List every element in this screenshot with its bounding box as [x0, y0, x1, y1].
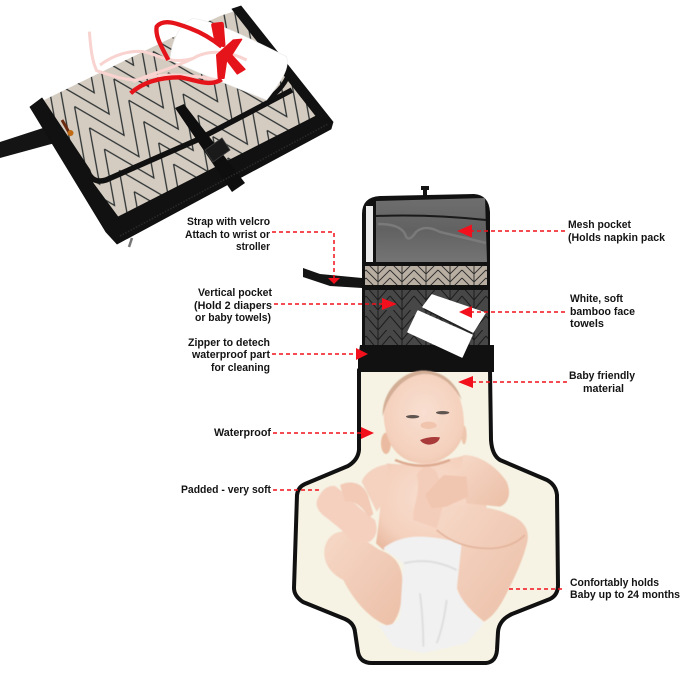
label: holds baby: Confortably holds	[570, 577, 659, 589]
label: zipper: waterproof part	[191, 349, 270, 361]
nose	[421, 422, 437, 429]
thigh crease	[437, 530, 525, 548]
photo: baby	[317, 371, 528, 653]
right arm	[460, 455, 509, 507]
left arm	[362, 464, 388, 512]
label: towels: bamboo face	[570, 306, 635, 318]
herringbone band	[365, 266, 487, 285]
left thigh and leg	[324, 531, 403, 627]
label: zipper: for cleaning	[211, 362, 270, 374]
strap with velcro	[303, 268, 362, 288]
label: holds baby	[570, 577, 680, 601]
label: padded: Padded - very soft	[181, 484, 271, 496]
label: mesh pocket	[568, 219, 666, 244]
zipper pull	[129, 238, 132, 247]
photo: folded changing bag	[0, 6, 333, 247]
flap edge	[88, 90, 292, 181]
leader: holds baby	[509, 588, 565, 590]
organiser body	[362, 194, 490, 345]
arrow: strap	[272, 232, 340, 284]
rolled towel and ribbons	[89, 18, 290, 100]
bag wrist strap	[0, 128, 55, 158]
herringbone fabric	[40, 10, 320, 220]
label: strap with velcro: Strap with velcro	[187, 216, 270, 228]
diaper	[378, 537, 484, 653]
eyes	[406, 411, 449, 418]
label: strap with velcro	[185, 216, 271, 253]
arrow: towels	[459, 306, 565, 318]
left ear	[381, 433, 391, 454]
pink ribbon	[89, 32, 247, 82]
label: baby friendly: material	[583, 383, 624, 395]
hand	[425, 475, 468, 508]
head	[384, 371, 464, 463]
diaper folds	[404, 561, 457, 647]
label: mesh pocket: Mesh pocket	[568, 219, 631, 231]
label: towels	[570, 293, 635, 330]
leader: padded	[273, 489, 320, 491]
bamboo towels	[408, 295, 485, 357]
label: towels: towels	[570, 318, 604, 330]
label: vertical pocket: Vertical pocket	[198, 287, 272, 299]
label: baby friendly	[569, 370, 636, 395]
right thigh and leg	[437, 505, 528, 622]
label: vertical pocket	[194, 287, 272, 324]
right foot	[413, 467, 447, 528]
hair	[383, 371, 462, 417]
dark vertical pocket	[365, 290, 488, 345]
arrow: zipper	[272, 348, 368, 360]
label: mesh pocket: (Holds napkin pack	[568, 232, 666, 244]
label: zipper: Zipper to detech	[188, 337, 270, 349]
mouth	[420, 437, 440, 445]
zipper	[120, 124, 328, 236]
cheek shadow under chin	[395, 460, 450, 466]
label: strap with velcro: stroller	[236, 241, 271, 253]
label: towels: White, soft	[570, 293, 623, 305]
label: zipper	[188, 337, 270, 374]
snap button	[421, 186, 429, 196]
right ear	[461, 426, 467, 444]
towel shadow band	[267, 70, 290, 100]
white inner strip	[366, 206, 373, 262]
zipper band	[358, 345, 494, 372]
label: vertical pocket: (Hold 2 diapers	[194, 300, 272, 312]
left hand	[340, 482, 373, 517]
logo tag	[62, 120, 74, 136]
left foot	[317, 486, 377, 543]
arrow: baby friendly material	[458, 376, 567, 388]
red ribbon	[131, 22, 245, 93]
panel: waterproof mat	[294, 370, 558, 663]
label: waterproof: Waterproof	[214, 427, 271, 439]
arrow: vertical pocket	[274, 298, 397, 310]
arrow: mesh pocket	[457, 224, 565, 238]
bag black border	[30, 6, 333, 244]
closure strap and buckle	[175, 104, 245, 192]
mesh pocket	[376, 198, 487, 262]
label: vertical pocket: or baby towels)	[195, 312, 271, 324]
panel: opened organiser section	[303, 186, 494, 372]
torso	[376, 455, 487, 550]
rolled white towel	[170, 18, 287, 100]
arrow: waterproof	[273, 427, 374, 439]
label: baby friendly: Baby friendly	[569, 370, 636, 382]
label: strap with velcro: Attach to wrist or	[185, 229, 271, 241]
